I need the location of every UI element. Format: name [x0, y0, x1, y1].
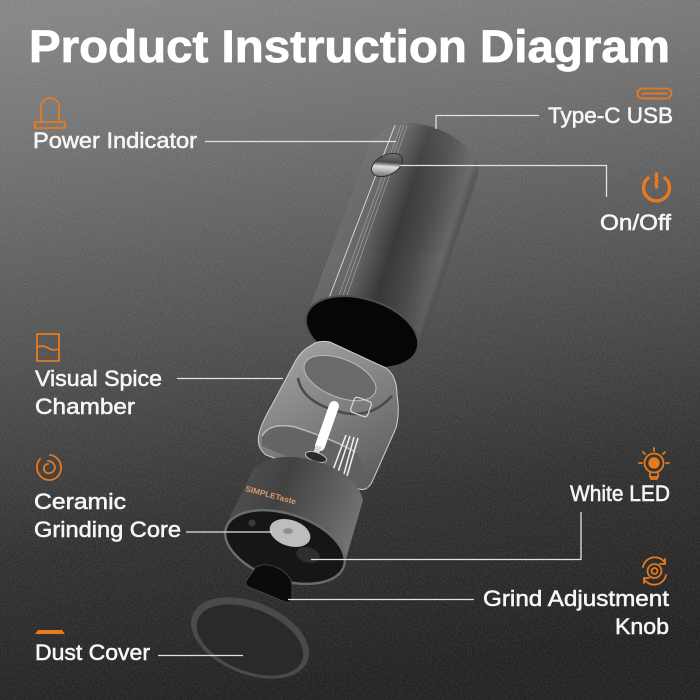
- label: grind adjustment knob: Knob: [615, 614, 669, 639]
- label: grind adjustment knob: Grind Adjustment: [483, 586, 670, 611]
- product: lower grinder base: [216, 457, 363, 598]
- icon: chamber: [37, 334, 59, 361]
- label: ceramic grinding core: Grinding Core: [34, 517, 181, 542]
- product: visual spice chamber: [258, 341, 398, 490]
- product: grind adjustment knob: [246, 565, 292, 603]
- icon: usb-c port: [638, 88, 672, 98]
- label: white led: White LED: [570, 481, 670, 506]
- ceramic core: [266, 514, 314, 552]
- label: power indicator: Power Indicator: [33, 128, 198, 153]
- label: on/off: [400, 166, 672, 235]
- opening of housing: [297, 283, 427, 381]
- label: visual spice chamber: Visual Spice: [35, 366, 162, 391]
- central shaft: [320, 406, 334, 446]
- label: grind adjustment knob: [288, 557, 670, 639]
- icon: gear cycle: [643, 557, 666, 585]
- title: Product Instruction Diagram: [29, 21, 670, 72]
- label: on/off: On/Off: [600, 210, 672, 235]
- label: ceramic grinding core: Ceramic: [34, 489, 126, 514]
- label: type-c usb: [436, 88, 673, 129]
- product: upper cylinder housing: [297, 123, 479, 381]
- label: dust cover: [35, 630, 243, 665]
- icon: swirl: [37, 455, 61, 480]
- icon: beacon light: [35, 98, 65, 128]
- on/off button: [368, 149, 406, 181]
- label: visual spice chamber: Chamber: [35, 394, 136, 419]
- icon: cover: [35, 630, 65, 634]
- icon: power symbol: [644, 174, 669, 201]
- bottom opening: [216, 496, 354, 598]
- brand logo: SIMPLETaste: [244, 484, 298, 507]
- white LED lens: [294, 545, 322, 565]
- label: ceramic grinding core: [34, 455, 272, 542]
- label: visual spice chamber: [35, 334, 283, 419]
- label: power indicator: [33, 98, 396, 153]
- label: type-c usb: Type-C USB: [548, 103, 673, 128]
- product: dust cover: [179, 581, 321, 695]
- label: dust cover: Dust Cover: [35, 640, 151, 665]
- label: white led: [311, 448, 670, 560]
- icon: light bulb: [639, 448, 669, 479]
- pins: [333, 435, 358, 476]
